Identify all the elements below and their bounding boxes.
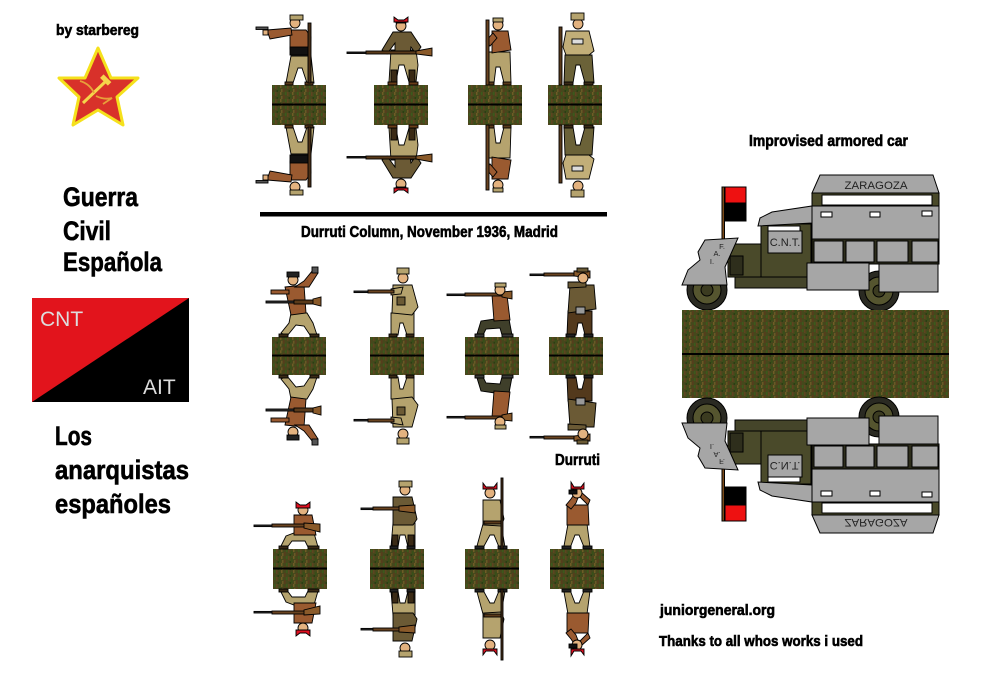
flag on truck xyxy=(722,187,746,240)
mirrored flag xyxy=(722,468,746,521)
mirrored truck lettering xyxy=(710,442,908,528)
grass base for armored car xyxy=(682,310,949,398)
credit: juniorgeneral.org: juniorgeneral.org xyxy=(659,602,775,619)
truck lettering: ZARAGOZA xyxy=(844,180,908,192)
truck lettering: C.N.T. xyxy=(770,237,800,249)
heading: Los anarquistas españoles xyxy=(55,421,189,519)
truck lettering xyxy=(710,180,908,266)
soldier: advancing with rifle xyxy=(361,481,424,657)
heading: Improvised armored car: Improvised armored car xyxy=(749,133,908,150)
heading: Los anarquistas españoles: anarquistas xyxy=(55,455,189,485)
truck lettering: F. xyxy=(719,242,725,251)
soldier row 2 xyxy=(266,267,603,445)
soldier row 3 xyxy=(254,478,604,660)
soldier: kneeling firing xyxy=(254,502,327,636)
truck body xyxy=(682,175,939,311)
flag: CNT AIT red and black xyxy=(32,298,189,402)
mirrored truck lettering: I. xyxy=(710,442,714,451)
heading: Guerra Civil Española: Española xyxy=(63,247,163,277)
soldier: aiming rifle xyxy=(354,268,424,444)
soldier: throwing grenade xyxy=(266,267,326,445)
heading: Durruti Column: Durruti Column, November 1936, Madrid xyxy=(301,224,558,241)
soldier: pistol xyxy=(256,15,326,195)
heading: Guerra Civil Española: Civil xyxy=(63,216,111,246)
mirrored truck lettering: C.N.T. xyxy=(770,459,800,471)
soldier: rifle at side xyxy=(465,478,519,660)
mirrored truck lettering: ZARAGOZA xyxy=(844,516,908,528)
credit: thanks line: Thanks to all whos works i used xyxy=(659,633,863,650)
soldier: standing at ease xyxy=(548,13,602,197)
soldier: firing rifle xyxy=(530,268,603,444)
flag: CNT AIT red and black: CNT xyxy=(40,308,83,331)
soldier: kneeling with rifle xyxy=(447,283,519,429)
label: Durruti: Durruti xyxy=(555,452,600,469)
credit: by starbereg: by starbereg xyxy=(56,22,139,39)
soldier row 1 xyxy=(256,13,602,197)
soldier: rifle upright xyxy=(468,18,522,192)
heading: Guerra Civil Española xyxy=(63,182,163,277)
armored car, upper view xyxy=(682,175,939,311)
icon: red star with hammer and sickle xyxy=(59,48,138,125)
heading: Los anarquistas españoles: Los xyxy=(55,421,92,451)
heading: Guerra Civil Española: Guerra xyxy=(63,182,139,212)
divider bar xyxy=(260,212,607,216)
mirrored truck lettering: A. xyxy=(713,450,721,459)
soldier: rifle with bayonet xyxy=(347,17,432,193)
truck lettering: I. xyxy=(710,257,714,266)
soldier: Durruti with binoculars xyxy=(550,482,604,656)
mirrored truck lettering: F. xyxy=(719,457,725,466)
heading: Los anarquistas españoles: españoles xyxy=(55,489,171,519)
mirrored truck body xyxy=(682,397,939,533)
armored car, mirrored view xyxy=(682,397,939,533)
truck lettering: A. xyxy=(713,249,721,258)
flag: CNT AIT red and black: AIT xyxy=(143,376,176,399)
